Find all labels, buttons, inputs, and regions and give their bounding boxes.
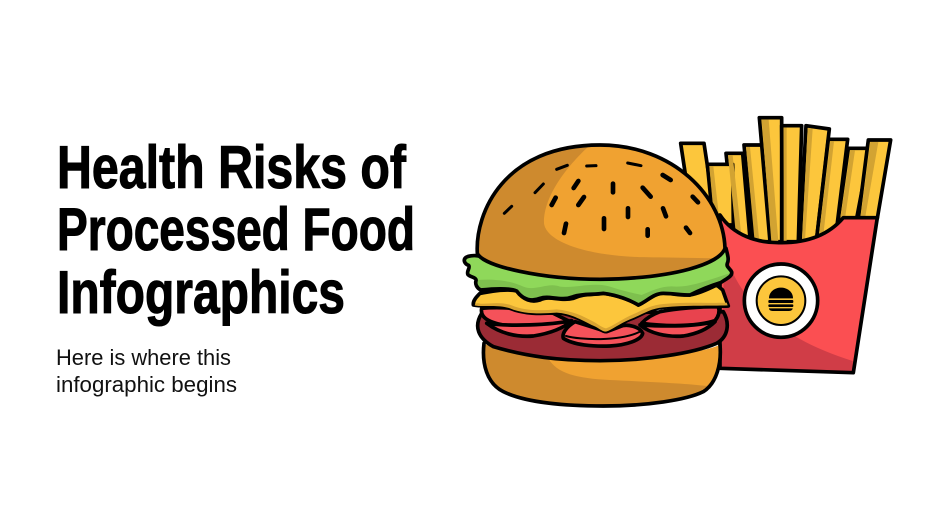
icon: french fries xyxy=(681,118,891,373)
top bun xyxy=(477,145,725,279)
patty xyxy=(478,312,727,361)
cheese xyxy=(473,285,728,332)
box logo xyxy=(744,264,818,337)
tomato slices xyxy=(481,307,719,346)
title: Health Risks of xyxy=(57,134,407,201)
lettuce xyxy=(464,248,732,305)
subtitle xyxy=(56,345,237,397)
fries sticks xyxy=(681,118,891,242)
fries box xyxy=(720,215,877,373)
title xyxy=(57,134,415,326)
title: Processed Food xyxy=(57,196,415,263)
sesame seeds xyxy=(504,163,698,236)
title: Infographics xyxy=(57,259,345,326)
bottom bun xyxy=(483,343,720,406)
subtitle: Here is where this xyxy=(56,345,231,370)
icon: burger xyxy=(464,145,732,406)
subtitle: infographic begins xyxy=(56,372,237,397)
